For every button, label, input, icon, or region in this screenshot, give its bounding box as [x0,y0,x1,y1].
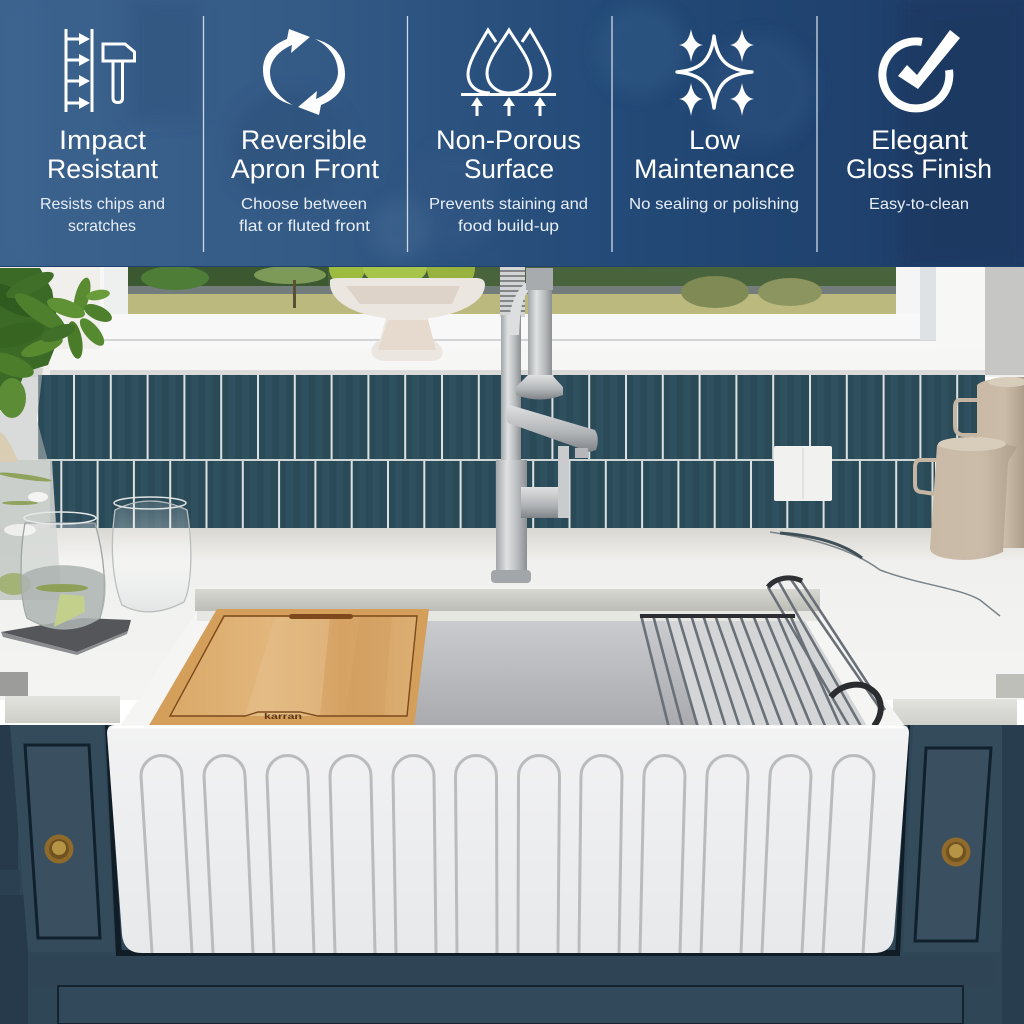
text: Impact Resistant: Resistant [47,154,158,184]
text: Reversible Apron Front: Reversible [241,125,367,155]
wall and window [0,266,1024,377]
cabinet [0,725,1024,1024]
fluted sink front [107,725,909,953]
countertop [0,528,1024,726]
jugs [915,377,1024,560]
icon: check mark ring [882,30,960,108]
text: Non-Porous Surface [429,125,588,235]
icon: wall with arrows and hammer [66,29,134,112]
text: Impact Resistant [41,130,164,231]
text: Reversible Apron Front [231,125,380,235]
backsplash tiles [38,375,985,528]
fruit bowl [329,244,485,361]
icon: sparkles [677,29,754,116]
text: Non-Porous Surface: food build-up [458,218,559,235]
drinking glass: front with lime [21,512,106,629]
text: Low Maintenance: Maintenance [634,154,795,184]
text: Reversible Apron Front: Choose between [241,196,367,213]
cutting board: karran [264,712,302,721]
text: Impact Resistant: Resists chips and [40,196,165,213]
text: Elegant Gloss Finish: Gloss Finish [846,154,992,184]
text: Impact Resistant: scratches [68,218,136,235]
text: Non-Porous Surface: Surface [464,154,554,184]
text: Elegant Gloss Finish [846,125,992,213]
wall socket [774,446,832,501]
text: Impact Resistant: Impact [59,125,147,155]
drinking glass: rear [112,497,191,612]
text: Low Maintenance: No sealing or polishing [629,196,799,213]
text: Reversible Apron Front: Apron Front [231,154,380,184]
brass knob: left [44,834,74,864]
faucet [491,267,598,583]
text: Non-Porous Surface: Prevents staining and [429,196,588,213]
text: Low Maintenance [629,125,799,213]
cutting board [148,609,429,727]
text: Reversible Apron Front: flat or fluted front [239,218,371,235]
drying rack [640,578,885,728]
text: Elegant Gloss Finish: Easy-to-clean [869,196,969,213]
dividers [204,16,817,252]
text: Low Maintenance: Low [689,125,741,155]
brass knob: right [942,838,970,866]
icon: reversible arrows [263,29,345,115]
icon: water drops on surface [461,30,556,116]
text: Elegant Gloss Finish: Elegant [871,125,969,155]
plant and vase [0,267,115,600]
header band [0,0,1024,267]
sink basin [120,589,905,728]
text: Non-Porous Surface: Non-Porous [436,125,581,155]
napkin [1,618,131,655]
